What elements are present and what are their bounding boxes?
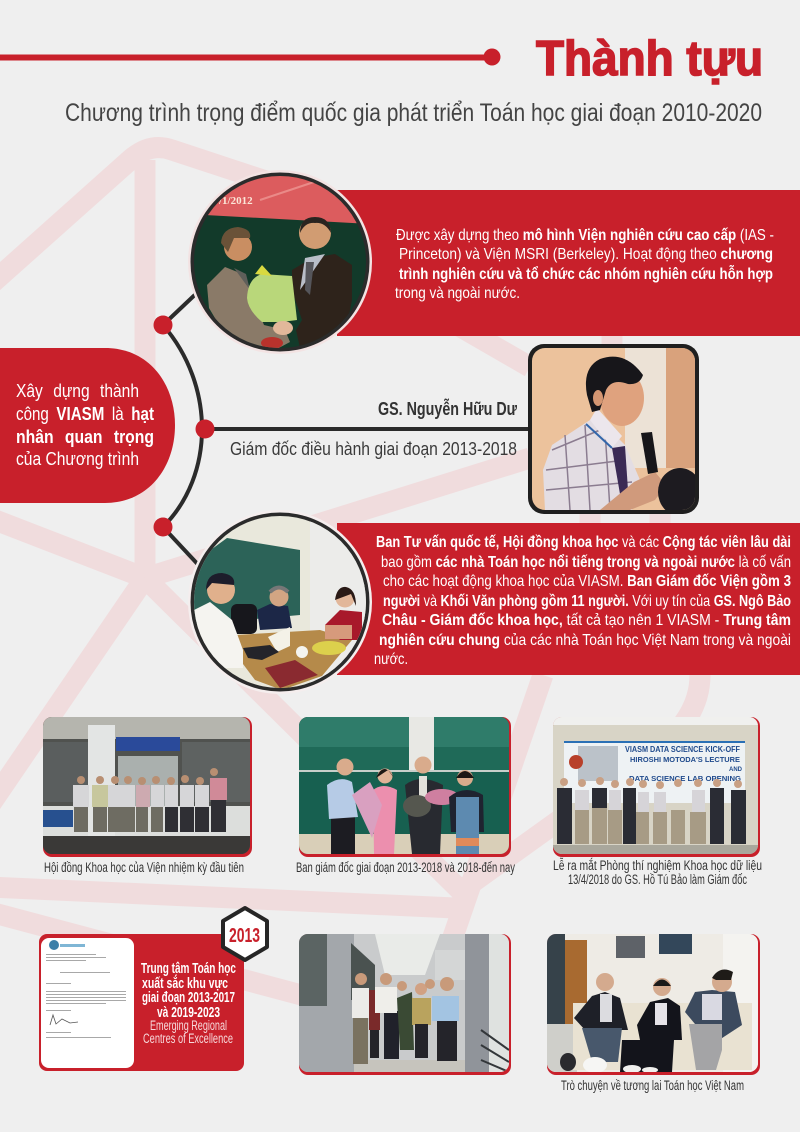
card: regional centre of excellence: giai đoạn 2013-2017 xyxy=(142,989,235,1006)
photo: portrait of GS. Nguyễn Hữu Dư xyxy=(528,344,702,516)
panel: bottom red band xyxy=(337,523,800,675)
panel: left statement: của Chương trình xyxy=(16,449,139,469)
badge: 2013 hexagon xyxy=(223,908,267,960)
role label: Giám đốc điều hành giai đoạn 2013-2018 xyxy=(230,439,517,459)
dot: top node xyxy=(154,316,172,334)
name label: GS. Nguyễn Hữu Dư xyxy=(378,398,518,419)
header rule with dot xyxy=(0,48,500,66)
photo: data science lab opening: HIROSHI MOTODA'S LECTURE xyxy=(630,757,740,764)
card: regional centre of excellence: Trung tâm Toán học xyxy=(141,960,236,977)
panel: top red band: Princeton) và Viện MSRI (Berkeley). Hoạt động theo chương xyxy=(399,246,773,263)
photo: circular meeting room xyxy=(188,510,372,695)
photo: data science lab opening: VIASM DATA SCIENCE KICK-OFF xyxy=(625,745,740,754)
panel: top red band: Được xây dựng theo mô hình Viện nghiên cứu cao cấp (IAS - xyxy=(396,227,774,244)
letter document xyxy=(41,938,134,1068)
panel: left statement: nhân quan trọng xyxy=(16,427,154,447)
title: Thành tựu xyxy=(536,32,763,86)
photo: circular handshake portrait xyxy=(188,170,372,355)
photo: data science lab opening: DATA SCIENCE LAB OPENING xyxy=(629,776,742,783)
caption: data science lab opening xyxy=(553,858,762,887)
photo: data science lab opening xyxy=(553,717,760,857)
photo: three men on sofa xyxy=(547,934,760,1075)
panel: top red band xyxy=(337,190,800,336)
card: regional centre of excellence: Emerging Regional xyxy=(150,1018,227,1033)
photo: data science lab opening: AND xyxy=(729,767,743,773)
panel: bottom red band: nước. xyxy=(374,651,408,668)
card: regional centre of excellence: Centres of Excellence xyxy=(143,1031,233,1046)
panel: left statement: Xây dựng thành xyxy=(16,381,139,401)
card: regional centre of excellence: và 2019-2023 xyxy=(157,1004,220,1021)
panel: left statement xyxy=(0,348,175,503)
card: regional centre of excellence: xuất sắc khu vực xyxy=(142,974,228,992)
photo: circular handshake portrait: /1/2012 xyxy=(218,195,253,207)
panel: bottom red band: Châu - Giám đốc khoa học, tất cả tạo nên 1 VIASM - Trung tâm xyxy=(382,612,791,629)
dot: bottom node xyxy=(154,518,172,536)
dot: middle node xyxy=(196,420,214,438)
caption: board of directors: Ban giám đốc giai đoạn 2013-2018 và 2018-đến nay xyxy=(296,860,515,875)
photo: scientific council xyxy=(43,717,252,857)
photo: group in corridor xyxy=(299,934,511,1075)
panel: left statement: công VIASM là hạt xyxy=(16,404,154,424)
timeline connector xyxy=(163,290,535,572)
photo: board of directors xyxy=(299,717,511,857)
panel: top red band: trong và ngoài nước. xyxy=(395,285,520,302)
panel: bottom red band: người và Khối Văn phòng gồm 11 người. Với uy tín của GS. Ngô Bảo xyxy=(383,593,791,610)
panel: bottom red band: bao gồm các nhà Toán học nổi tiếng trong và ngoài nước là cố vấn xyxy=(381,553,791,571)
badge: 2013 hexagon: 2013 xyxy=(229,925,260,947)
caption: scientific council: Hội đồng Khoa học của Viện nhiệm kỳ đầu tiên xyxy=(44,860,244,875)
card: regional centre of excellence xyxy=(39,934,244,1071)
background network pattern xyxy=(0,148,700,1000)
